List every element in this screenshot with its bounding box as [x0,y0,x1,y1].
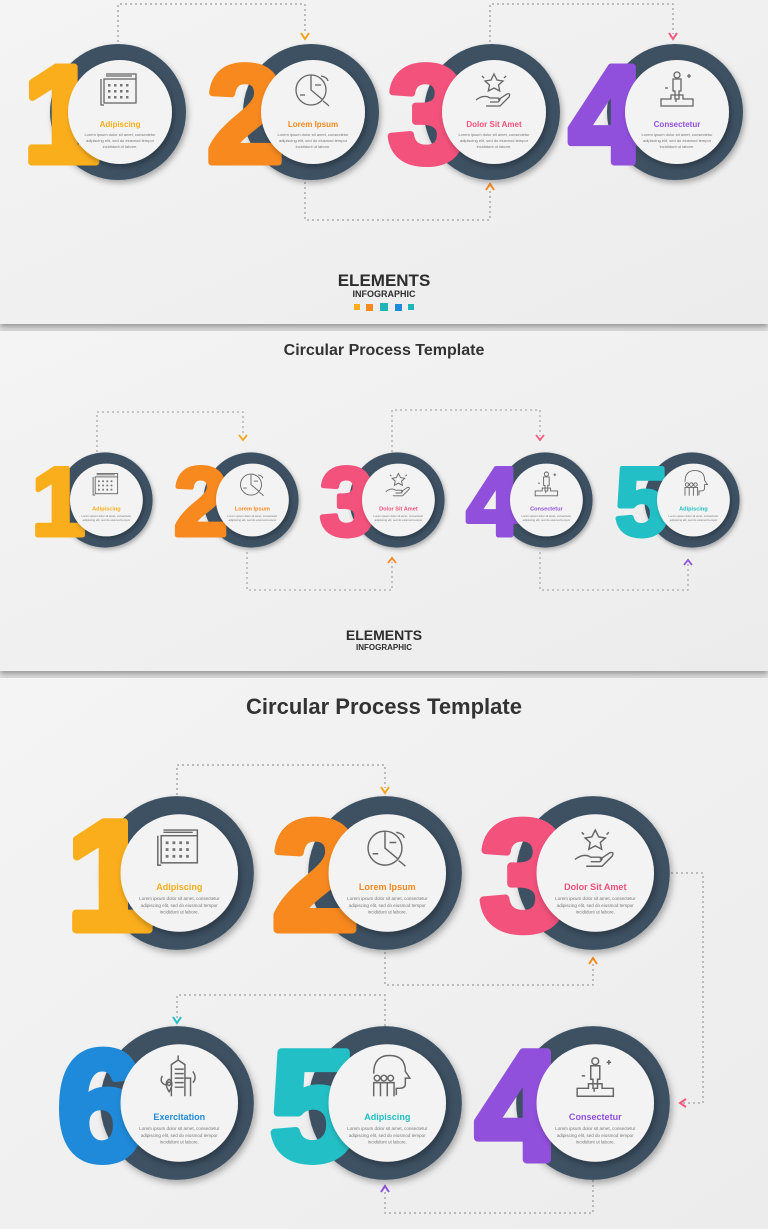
step 3: incididunt ut labore. [477,144,511,149]
p3 step 6: 6 [57,1019,144,1193]
step 3: 3 [388,38,465,192]
step 1: 1 [23,38,100,192]
logo: elements infographic: ELEMENTS [338,271,430,290]
p3 step 5: adipiscing elit, sed do eiusmod tempor [349,1133,426,1138]
p3 step 4 [475,1020,670,1194]
p3 step 5: 5 [270,1019,356,1193]
p3 step 5 [270,1020,462,1194]
p3 step 6: adipiscing elit, sed do eiusmod tempor [141,1133,218,1138]
step 4: incididunt ut labore. [660,144,694,149]
p2 step 3: Dolor Sit Amet [379,506,418,512]
p2 step 2 [174,449,299,556]
p3 step 4: 4 [475,1019,562,1193]
p3 step 3: Dolor Sit Amet [564,882,626,892]
p2 step 1: Adipiscing [92,506,121,512]
p2 step 1: adipiscing elit, sed do eiusmod tempor [83,518,130,522]
p2 step 2: 2 [174,449,228,556]
p2 step 5: adipiscing elit, sed do eiusmod tempor [670,518,717,522]
panel: six-step [0,678,768,1229]
arrow to 4 [669,33,677,39]
p2 step 2: Lorem Ipsum [235,506,270,512]
step 4 [569,38,743,192]
step 4: Lorem ipsum dolor sit amet, consectetur [641,132,713,137]
connector 1 to 2 [118,4,305,42]
p3 step 1: adipiscing elit, sed do eiusmod tempor [141,903,218,908]
p3 step 5: Adipiscing [364,1112,410,1122]
p3 step 5: Lorem ipsum dolor sit amet, consectetur [347,1126,428,1131]
p3 step 3: 3 [480,789,567,963]
p2 step 1 [32,449,153,556]
p2 step 4: Consectetur [530,506,564,512]
p3 step 1: 1 [66,789,153,963]
step 2: Lorem ipsum dolor sit amet, consectetur [277,132,349,137]
connector 3 to 4 [490,4,673,42]
title panel 2: Circular Process Template [284,342,484,359]
p3 step 5: incididunt ut labore. [368,1140,407,1145]
p3 step 1: Lorem ipsum dolor sit amet, consectetur [139,896,220,901]
panel: five-step [0,331,768,671]
step 2: 2 [207,38,284,192]
arrow to 2 [301,33,309,39]
p3 step 6: incididunt ut labore. [160,1140,199,1145]
p3 step 1 [66,790,254,964]
p3 step 6 [57,1020,254,1194]
p2 step 5: 5 [615,449,669,556]
p3 step 3: incididunt ut labore. [576,910,615,915]
p3 step 1: Adipiscing [156,882,202,892]
step 1: Adipiscing [100,120,141,129]
step 4: Consectetur [654,120,700,129]
p2 step 2: adipiscing elit, sed do eiusmod tempor [229,518,276,522]
step 3: Dolor Sit Amet [466,120,522,129]
p3 step 3: Lorem ipsum dolor sit amet, consectetur [555,896,636,901]
logo panel 2: ELEMENTS [346,627,422,643]
connector 2 to 3 [305,182,490,220]
step 2: Lorem Ipsum [288,120,338,129]
arrows panel 3 [173,787,686,1192]
p3 step 4: incididunt ut labore. [576,1140,615,1145]
p3 step 2 [272,790,462,964]
p2 step 5 [615,449,740,556]
p2 step 1: 1 [32,449,85,556]
p2 step 5: Adipiscing [679,506,708,512]
p2 step 3 [320,449,445,556]
p2 step 2: Lorem ipsum dolor sit amet, consectetur [228,514,277,518]
p3 step 3 [480,790,670,964]
p2 step 4 [467,449,593,556]
p3 step 1: incididunt ut labore. [160,910,199,915]
p2 step 4: 4 [467,449,521,556]
connectors panel 3 [177,765,703,1213]
title panel 3: Circular Process Template [246,694,522,719]
p3 step 4: Lorem ipsum dolor sit amet, consectetur [555,1126,636,1131]
p3 step 4: Consectetur [569,1112,622,1122]
step 3 [388,38,560,192]
p2 step 5: Lorem ipsum dolor sit amet, consectetur [669,514,718,518]
p3 step 2: Lorem ipsum dolor sit amet, consectetur [347,896,428,901]
p3 step 6: Lorem ipsum dolor sit amet, consectetur [139,1126,220,1131]
logo: elements infographic [338,271,430,311]
step 1: incididunt ut labore. [103,144,137,149]
p3 step 4: adipiscing elit, sed do eiusmod tempor [557,1133,634,1138]
step 2: incididunt ut labore. [296,144,330,149]
logo: elements infographic: INFOGRAPHIC [352,289,416,299]
step 3: Lorem ipsum dolor sit amet, consectetur [458,132,530,137]
p3 step 2: 2 [272,789,359,963]
p3 step 2: Lorem Ipsum [359,882,416,892]
p3 step 6: Exercitation [153,1112,205,1122]
arrow to 3 [486,184,494,190]
arrows panel 2 [239,435,692,565]
p2 step 3: 3 [320,449,374,556]
p2 step 3: adipiscing elit, sed do eiusmod tempor [375,518,422,522]
p3 step 2: incididunt ut labore. [368,910,407,915]
p3 step 2: adipiscing elit, sed do eiusmod tempor [349,903,426,908]
step 2: adipiscing elit, sed do eiusmod tempor [279,138,348,143]
p3 step 3: adipiscing elit, sed do eiusmod tempor [557,903,634,908]
step 1: adipiscing elit, sed do eiusmod tempor [86,138,155,143]
step 4: 4 [569,38,646,192]
logo panel 2 [346,627,422,652]
step 3: adipiscing elit, sed do eiusmod tempor [460,138,529,143]
step 2 [207,38,379,192]
p2 step 4: Lorem ipsum dolor sit amet, consectetur [522,514,571,518]
logo panel 2: INFOGRAPHIC [356,643,412,652]
connectors panel 2 [97,410,688,590]
step 1 [23,38,186,192]
p2 step 3: Lorem ipsum dolor sit amet, consectetur [374,514,423,518]
step 1: Lorem ipsum dolor sit amet, consectetur [84,132,156,137]
p2 step 1: Lorem ipsum dolor sit amet, consectetur [82,514,131,518]
step 4: adipiscing elit, sed do eiusmod tempor [643,138,712,143]
p2 step 4: adipiscing elit, sed do eiusmod tempor [523,518,570,522]
panel: top four-step [0,0,768,324]
